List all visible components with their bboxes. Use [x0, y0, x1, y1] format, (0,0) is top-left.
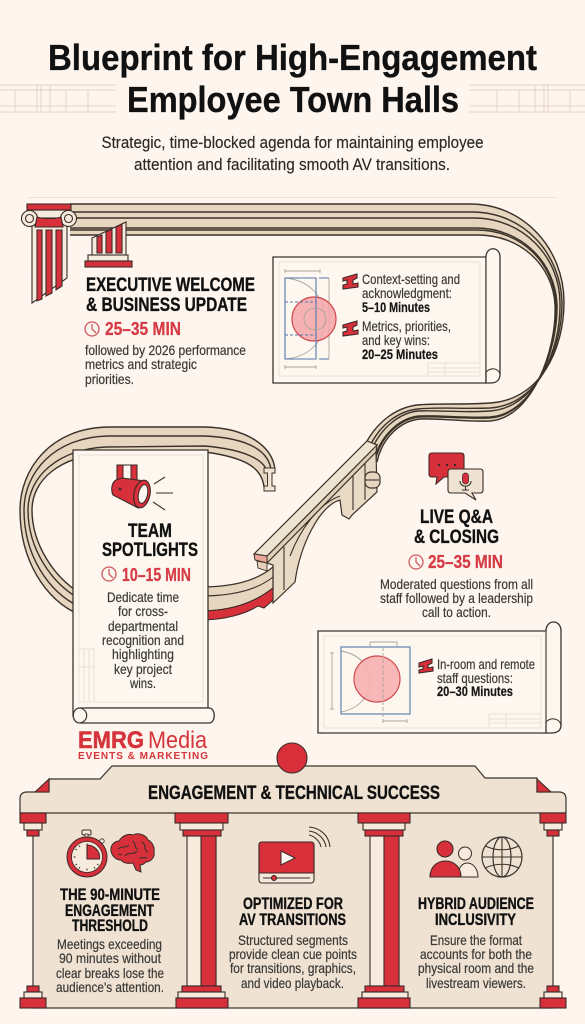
description: hybrid audience: physical room and the [418, 960, 534, 976]
heading: engagement: ENGAGEMENT & TECHNICAL SUCCESS [148, 782, 440, 804]
panel: blueprint scroll, Q&A [318, 622, 561, 733]
duration: 25–35 MIN [428, 552, 503, 572]
lower beam segment with red underside [200, 567, 273, 620]
text: metrics: 20–25 Minutes [362, 346, 438, 362]
description: 90-minute threshold: clear breaks lose the [56, 965, 164, 981]
title [48, 37, 537, 120]
upper serpentine beam [70, 204, 564, 462]
heading: optimized for AV transitions [239, 895, 346, 929]
heading: 90-minute threshold: ENGAGEMENT [65, 902, 154, 920]
description: AV transitions: provide clean cue points [229, 946, 357, 962]
text: in-room and remote: staff questions: [437, 670, 513, 686]
subtitle [102, 134, 484, 174]
description: metrics and strategic [85, 356, 197, 372]
description: Dedicate time [107, 589, 179, 605]
heading: team spotlights: SPOTLIGHTS [102, 539, 198, 561]
description: wins. [129, 675, 156, 691]
description: key project [114, 661, 172, 677]
icon: brain [111, 834, 154, 872]
description: hybrid audience: accounts for both the [420, 946, 532, 962]
heading: team spotlights [102, 520, 198, 561]
decorative blueprint lines: left of title [0, 85, 116, 112]
description: hybrid audience: Ensure the format [430, 932, 522, 948]
icon: stopwatch [67, 830, 107, 877]
text: context-setting: 5–10 Minutes [362, 299, 430, 315]
description: 90-minute threshold: 90 minutes without [59, 950, 161, 966]
panel: engagement and technical success temple [20, 743, 566, 1008]
description: 90-minute threshold [56, 936, 164, 995]
text: context-setting: acknowledgment: [362, 285, 452, 301]
description: AV transitions: and video playback. [241, 975, 344, 991]
description: AV transitions [229, 932, 357, 991]
duration: 25–35 MIN [105, 319, 181, 339]
column: left half [20, 813, 46, 1008]
description: staff followed by a leadership [380, 590, 533, 606]
icon: broken column capital [22, 204, 76, 303]
icon: red beam bullet [343, 321, 358, 336]
heading: hybrid audience: HYBRID AUDIENCE [418, 895, 534, 913]
red corner triangles [35, 779, 551, 792]
icon: red beam bullet [419, 659, 433, 673]
heading: executive welcome: EXECUTIVE WELCOME [86, 274, 255, 296]
heading: 90-minute threshold [60, 886, 160, 935]
icon: broken column base [85, 222, 132, 267]
roof pediment [20, 766, 566, 813]
title: Blueprint for High-Engagement [48, 37, 537, 78]
logo: EMRG Media: Media [148, 727, 208, 754]
description: 90-minute threshold: audience's attention. [56, 979, 164, 995]
text: context-setting [362, 271, 460, 315]
floor plan diagram [330, 642, 410, 723]
title: Employee Town Halls [127, 79, 459, 120]
heading: live Q&A: LIVE Q&A [420, 506, 493, 528]
description: departmental [108, 618, 178, 634]
logo: EMRG Media: EMRG [78, 727, 144, 754]
subtitle: attention and facilitating smooth AV transitions. [134, 156, 450, 174]
column: centre left [175, 813, 228, 1008]
text: metrics: Metrics, priorities, [362, 318, 451, 334]
description: hybrid audience: livestream viewers. [426, 975, 526, 991]
description: highlighting [112, 646, 174, 662]
heading: hybrid audience [418, 895, 534, 929]
heading: live Q&A: & CLOSING [414, 526, 499, 548]
column: centre right [358, 813, 410, 1008]
text: in-room and remote: 20–30 Minutes [437, 683, 513, 699]
description: priorities. [85, 371, 134, 387]
heading: team spotlights: TEAM [128, 520, 172, 542]
description: recognition and [102, 632, 184, 648]
text: context-setting: Context-setting and [362, 271, 460, 287]
text: metrics: and key wins: [362, 332, 430, 348]
subtitle: Strategic, time-blocked agenda for maintaining employee [102, 134, 484, 152]
heading line 2: & BUSINESS UPDATE [86, 294, 247, 316]
temple body [33, 810, 553, 1008]
decorative blueprint lines: right of title [469, 85, 585, 112]
description: call to action. [422, 604, 491, 620]
description: AV transitions: for transitions, graphics, [230, 960, 356, 976]
description: hybrid audience [418, 932, 534, 991]
text: in-room and remote [437, 656, 535, 699]
text: in-room and remote: In-room and remote [437, 656, 535, 672]
duration: 10–15 MIN [122, 565, 191, 585]
description: 90-minute threshold: Meetings exceeding [57, 936, 162, 952]
description [102, 589, 184, 691]
description [85, 342, 246, 387]
icon: clock [409, 555, 423, 569]
heading: optimized for AV transitions: AV TRANSITIONS [239, 911, 346, 929]
panel: blueprint scroll, executive welcome [273, 249, 500, 383]
icon: red beam bullet [343, 274, 358, 289]
heading: 90-minute threshold: THRESHOLD [72, 917, 148, 935]
text: metrics [362, 318, 451, 362]
heading: 90-minute threshold: THE 90-MINUTE [60, 886, 160, 904]
panel: team spotlights scroll [73, 450, 214, 723]
left loop beam [20, 427, 275, 615]
icon: clock [85, 322, 99, 336]
description: AV transitions: Structured segments [238, 932, 348, 948]
logo: EMRG Media: EVENTS & MARKETING [78, 751, 208, 762]
section: executive welcome [85, 274, 255, 387]
description: followed by 2026 performance [85, 342, 246, 358]
icon: clock [102, 567, 116, 581]
heading: live Q&A [414, 506, 499, 548]
logo: EMRG Media [78, 727, 208, 762]
section: live Q&A [380, 453, 533, 620]
heading: hybrid audience: INCLUSIVITY [435, 911, 516, 929]
icon: video player [259, 827, 330, 883]
diagonal bridge truss [254, 441, 380, 603]
icon: spotlight [112, 465, 173, 510]
column: right half [540, 813, 566, 1008]
icon: chat bubbles with microphone [429, 453, 483, 500]
icon: audience and globe [430, 837, 522, 877]
heading: optimized for AV transitions: OPTIMIZED FOR [243, 895, 343, 913]
roof finial [277, 743, 307, 773]
description: for cross- [118, 603, 168, 619]
floor plan diagram [285, 269, 336, 369]
description [380, 576, 533, 620]
description: Moderated questions from all [380, 576, 533, 592]
